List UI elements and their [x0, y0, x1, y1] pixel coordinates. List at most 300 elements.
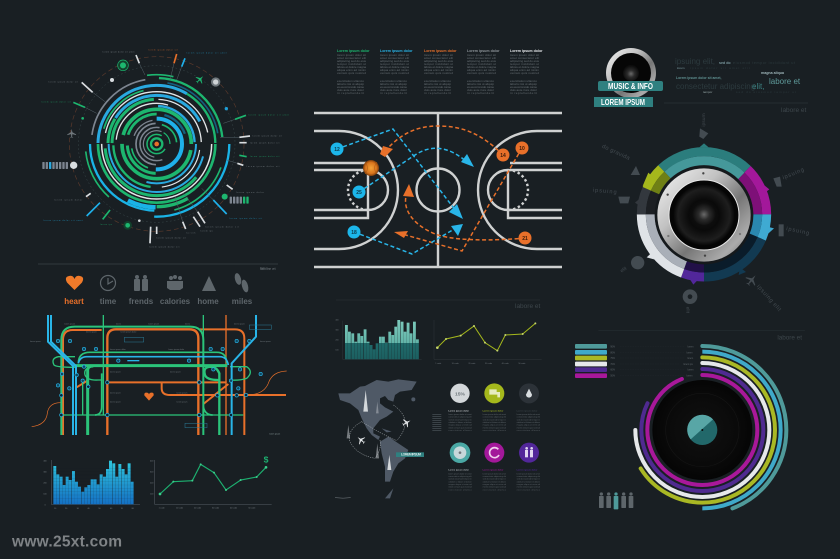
map scale: [335, 497, 351, 499]
center dot: [154, 142, 159, 146]
info text blocks: cididunt ut labore et dolore: [448, 421, 472, 424]
column 1: in reprehenderit: [337, 91, 364, 95]
column 3: laboris nisi ut aliquip: [424, 82, 451, 86]
player markers: 12: [334, 147, 340, 153]
icon: 15 percent: 15%: [455, 391, 466, 397]
wheel labels: lorem ipsum dolor sit amet: [103, 50, 135, 53]
x labels: [54, 508, 135, 510]
icon: disc: [683, 289, 697, 304]
x labels: 30: [77, 508, 80, 510]
label: heart: heart: [64, 297, 84, 306]
icon: heart: [66, 276, 83, 290]
info text blocks: consectetur adipiscing elit: [483, 475, 506, 478]
line: [437, 323, 535, 351]
icon: airplane green: [194, 73, 206, 86]
metro labels: lorem ipsum: [260, 340, 271, 343]
legend labels: 60%: [610, 370, 615, 372]
column 4: aliqua enim ad minim: [467, 68, 496, 72]
column 1: [337, 49, 370, 95]
column 2: [380, 49, 413, 95]
dollar sign: $: [264, 454, 269, 464]
info text blocks: sed do eiusmod tempor in: [517, 418, 541, 421]
column 3: veniam quis nostrud: [424, 71, 453, 75]
info text blocks: minim veniam quis nostrud: [448, 426, 472, 429]
icon: airplane grey: [67, 129, 76, 138]
column 2: in reprehenderit: [380, 91, 407, 95]
teal bar chart: [335, 320, 422, 359]
wheel labels: lorem ipsum dolor sit: [205, 225, 239, 228]
info text blocks: sed do eiusmod tempor in: [483, 478, 507, 481]
column 4: [467, 49, 500, 95]
metro labels: lorem ipsum: [177, 391, 188, 394]
bar stripes: [53, 468, 134, 498]
points: [159, 463, 267, 495]
people row right: [230, 197, 249, 204]
bars: [53, 461, 134, 504]
metro labels: lorem: [185, 323, 190, 326]
icon: refresh: [484, 443, 504, 463]
metro labels: lorem ipsum: [110, 400, 121, 403]
info text blocks: lorem ipsum dolor sit amet: [517, 413, 540, 416]
metro label boxes: [124, 325, 271, 428]
icon: heart: [144, 393, 154, 401]
axis labels: 20 code: [468, 363, 476, 365]
info circles grid: [432, 383, 541, 491]
x labels: 50: [98, 508, 101, 510]
column 2: Lorem ipsum dolor: [380, 49, 413, 53]
icon: couple: [519, 443, 539, 463]
axis labels: 10 code: [176, 507, 184, 509]
wheel labels: lorem ipsum dolor sit amet: [43, 219, 83, 222]
metro labels: lorem ipsum dolor: [110, 348, 126, 351]
metro labels: lorem ipsum: [234, 323, 245, 326]
word cloud: ipsuing elit,: [675, 57, 715, 66]
info text blocks: magna aliqua ut enim ad: [448, 424, 472, 427]
basketball text columns: [337, 49, 543, 95]
column 4: ex ea commodo conse: [467, 85, 494, 89]
axes: 200: [43, 483, 48, 485]
info text blocks: sed do eiusmod tempor in: [517, 478, 541, 481]
word cloud: sed do eiusmod tempor ut: [736, 90, 796, 94]
column 3: duis aute irure dolor: [424, 88, 451, 92]
player markers: [330, 142, 532, 244]
world map: [335, 379, 424, 498]
axes: 300: [43, 472, 48, 474]
icon: home tent: [202, 276, 216, 291]
info text blocks: consectetur adipiscing elit: [448, 475, 472, 478]
axes: 0: [45, 505, 47, 507]
column 3: amet consectetur elit: [424, 56, 453, 60]
legend labels: lorem: [687, 375, 693, 378]
icon: faucet: [484, 383, 504, 403]
axes: [335, 320, 422, 359]
map pins: [347, 390, 391, 470]
icon row: [64, 272, 253, 306]
info text blocks: cididunt ut labore et dolore: [483, 480, 507, 483]
wheel labels: lorem ipsum dolor sit: [253, 135, 282, 138]
label: miles: miles: [232, 297, 253, 306]
axis labels: 100: [150, 493, 154, 495]
green lines: [53, 315, 250, 435]
column 1: veniam quis nostrud: [337, 71, 366, 75]
icon: clock: [100, 276, 116, 290]
axes: 400: [43, 461, 48, 463]
column 3: adipiscing sed do eius: [424, 59, 454, 63]
info text blocks: consectetur adipiscing elit: [448, 416, 472, 419]
points: [436, 322, 536, 352]
column 2: veniam quis nostrud: [380, 71, 409, 75]
axis labels: 30 code: [485, 363, 493, 365]
info text blocks: magna aliqua ut enim ad: [483, 424, 507, 427]
people row left: [42, 162, 68, 169]
axis labels: 40 code: [502, 363, 510, 365]
info text blocks: magna aliqua ut enim ad: [483, 483, 507, 486]
column 2: duis aute irure dolor: [380, 88, 407, 92]
axes: [155, 460, 272, 504]
metro labels: lorem ipsum: [177, 400, 188, 403]
x labels: 70: [121, 508, 124, 510]
info text blocks: magna aliqua ut enim ad: [517, 483, 541, 486]
info text blocks: cididunt ut labore et dolore: [517, 421, 541, 424]
wheel labels: lorem ipsum dolor sit: [149, 245, 180, 248]
column 3: lorem ipsum dolor sit: [424, 53, 453, 57]
column 2: amet consectetur elit: [380, 56, 409, 60]
icon: figure: [779, 224, 784, 236]
column 1: duis aute irure dolor: [337, 88, 364, 92]
label: figure: ipsuing: [786, 226, 810, 237]
info text blocks: Lorem ipsum dolor: [448, 410, 469, 412]
blue bar chart: [43, 460, 140, 510]
orange lines: [32, 315, 287, 435]
column 4: amet consectetur elit: [467, 56, 496, 60]
column 4: duis aute irure dolor: [467, 88, 494, 92]
icon: footprints: [234, 272, 250, 293]
column 5: [510, 49, 543, 95]
column 2: ex ea commodo conse: [380, 85, 407, 89]
land masses: [338, 379, 417, 498]
column 2: aliqua enim ad minim: [380, 68, 410, 72]
divider and caption: labore et: [777, 335, 802, 342]
label: disc: elit: [685, 307, 691, 314]
small dots and markers: [70, 60, 228, 230]
column 4: tempor incididunt ut: [467, 62, 496, 66]
info text blocks: minim veniam quis nostrud: [517, 486, 541, 489]
metro map: [30, 267, 287, 436]
column 5: aliqua enim ad minim: [510, 68, 540, 72]
dashed guide rings: [69, 57, 244, 231]
blue arrowheads: [449, 154, 474, 236]
column 4: Lorem ipsum dolor: [467, 49, 500, 53]
info text blocks: exercitation ullamco: [448, 429, 472, 432]
player markers: 21: [522, 236, 528, 242]
info text blocks: lorem ipsum dolor sit amet: [483, 472, 506, 475]
axes: 300: [335, 330, 340, 332]
word cloud: labore et: [769, 77, 801, 86]
ring icons and labels: [592, 113, 810, 314]
column 4: in reprehenderit: [467, 91, 494, 95]
info text blocks: lorem ipsum dolor sit amet: [483, 413, 506, 416]
column 3: [424, 49, 457, 95]
wheel labels: lorem ipsum dolor sit: [148, 49, 178, 52]
segment pointers: [635, 143, 774, 285]
player markers: 10: [519, 146, 525, 152]
info text blocks: exercitation ullamco: [517, 488, 541, 491]
label: plane: ipsuing elit: [755, 284, 782, 313]
metro labels: lorem ipsum: [269, 433, 280, 436]
axis labels: 400: [150, 461, 154, 463]
x labels: 40: [87, 508, 90, 510]
axis labels: [435, 363, 526, 365]
column 2: tempor incididunt ut: [380, 62, 409, 66]
metro labels: [30, 267, 280, 436]
label: calories: calories: [160, 297, 191, 306]
column 5: labore et dolore magna: [510, 65, 539, 69]
icon: vinyl record: [652, 380, 752, 480]
label: cloud: ipsuing: [592, 188, 617, 196]
column 4: exercitation ullamco: [467, 79, 494, 83]
column 5: veniam quis nostrud: [510, 71, 539, 75]
legend labels: 90%: [610, 346, 615, 348]
axis labels: 30 code: [212, 507, 220, 509]
label: friends: frends: [129, 297, 154, 306]
column 1: exercitation ullamco: [337, 79, 364, 83]
icon: cloud group: [618, 197, 630, 203]
info text blocks: lorem ipsum dolor sit amet: [448, 472, 472, 475]
line: [160, 464, 266, 494]
word cloud: tempor: [703, 90, 712, 94]
column 5: laboris nisi ut aliquip: [510, 82, 537, 86]
banner: music and info: MUSIC & INFO: [608, 82, 653, 91]
column 3: labore et dolore magna: [424, 65, 453, 69]
info text blocks: exercitation ullamco: [483, 429, 507, 432]
legend labels: lorem ips: [683, 363, 694, 366]
side stripes: [432, 414, 441, 431]
info text blocks: sed do eiusmod tempor in: [483, 418, 507, 421]
label: people: ipsuing: [782, 167, 805, 181]
legend bars: [575, 344, 607, 378]
axis labels: 10 code: [452, 363, 460, 365]
column 2: adipiscing sed do eius: [380, 59, 410, 63]
legend labels: lorem: [687, 357, 693, 360]
icon: teal disc: [450, 442, 470, 463]
info text blocks: cididunt ut labore et dolore: [483, 421, 507, 424]
banner: lorem ipsum: LOREM IPSUM: [601, 98, 645, 107]
basketball court diagram: [314, 113, 562, 267]
olive line chart: [434, 320, 542, 365]
column 1: adipiscing sed do eius: [337, 59, 366, 63]
green line chart: [150, 454, 272, 509]
metro labels: lorem ipsum dolor: [121, 331, 137, 334]
divider and caption: labore et: [781, 107, 806, 114]
legend labels: 50%: [610, 376, 615, 378]
column 1: tempor incididunt ut: [337, 62, 366, 66]
axes: 100: [43, 493, 48, 495]
info text blocks: magna aliqua ut enim ad: [448, 483, 472, 486]
metro labels: lorem ipsum: [170, 371, 181, 374]
icon: round: [631, 256, 644, 269]
info text blocks: Lorem ipsum dolor: [483, 470, 503, 472]
player markers: 25: [356, 190, 362, 196]
icon: friends: [134, 275, 148, 291]
column 2: exercitation ullamco: [380, 79, 407, 83]
wheel labels: lorem ipsum dolor sit amet: [187, 52, 227, 55]
column 4: adipiscing sed do eius: [467, 59, 496, 63]
icon: speaker: [655, 166, 753, 264]
column 5: lorem ipsum dolor sit: [510, 53, 539, 57]
axis labels: 50 code: [518, 363, 526, 365]
wheel labels: lorem ipsum dolor: [236, 191, 264, 194]
info text blocks: cididunt ut labore et dolore: [517, 480, 541, 483]
axes: [43, 460, 140, 507]
column 5: ex ea commodo conse: [510, 85, 537, 89]
x labels: 20: [65, 508, 68, 510]
word cloud: elit,: [752, 82, 764, 91]
section divider: center: labore et: [515, 303, 540, 310]
orange arrowheads: [380, 146, 414, 238]
metro labels: lorem ipsum: [110, 371, 121, 374]
axis labels: 1 code: [435, 363, 442, 365]
metro labels: lorem: [116, 323, 121, 326]
metro labels: labore et: [260, 267, 268, 270]
people row: [599, 492, 633, 509]
label: top: ipsum: [701, 113, 707, 127]
axes: 200: [335, 340, 340, 342]
column 4: veniam quis nostrud: [467, 71, 496, 75]
axis labels: 300: [150, 472, 154, 474]
info text blocks: consectetur adipiscing elit: [483, 416, 506, 419]
axis labels: 50 code: [248, 507, 256, 509]
axis labels: 20 code: [194, 507, 202, 509]
info text blocks: sed do eiusmod tempor in: [448, 418, 472, 421]
info text blocks: lorem ipsum dolor sit amet: [517, 472, 540, 475]
column 1: aliqua enim ad minim: [337, 68, 366, 72]
watermark: www.25xt.com: [11, 534, 122, 550]
column 3: aliqua enim ad minim: [424, 68, 454, 72]
wheel labels: lorem ips: [201, 229, 213, 232]
column 1: ex ea commodo conse: [337, 85, 364, 89]
info text blocks: exercitation ullamco: [448, 488, 472, 491]
info text blocks: cididunt ut labore et dolore: [448, 480, 472, 483]
icon row divider and caption: labore et: [260, 266, 276, 271]
progress arcs: [618, 346, 786, 514]
column 5: tempor incididunt ut: [510, 62, 539, 66]
wheel labels: lorem ipsum dolor sit: [41, 101, 71, 104]
concentric arcs upper half: [87, 75, 226, 213]
info text blocks: [448, 410, 541, 491]
word cloud: ipsum dolor sit amet elit: [690, 66, 750, 70]
legend labels: lorem: [688, 345, 694, 348]
blue play arrows: [337, 129, 468, 254]
wheel labels: lorem ipsum dolor sit: [247, 165, 280, 168]
info text blocks: minim veniam quis nostrud: [483, 426, 507, 429]
colored segments inner: [650, 161, 758, 268]
metro labels: lorem ipsum: [86, 331, 97, 334]
column 5: amet consectetur elit: [510, 56, 539, 60]
info text blocks: minim veniam quis nostrud: [517, 426, 541, 429]
speaker ring infographic: [592, 113, 810, 314]
word cloud: lorem: [677, 66, 685, 70]
label: time: time: [100, 297, 117, 306]
icon: tent: [631, 166, 640, 175]
x labels: 80: [132, 508, 135, 510]
wheel labels: lorem ipsum dolor: [54, 198, 83, 201]
word cloud: eiusmod tempor incididunt ut: [733, 61, 795, 65]
axis labels: 40 code: [230, 507, 238, 509]
info text blocks: minim veniam quis nostrud: [483, 486, 507, 489]
flight paths: [349, 405, 405, 458]
legend labels: lorem: [688, 369, 694, 372]
icon: top: [699, 128, 708, 139]
column 3: Lorem ipsum dolor: [424, 49, 457, 53]
column 2: labore et dolore magna: [380, 65, 409, 69]
column 1: amet consectetur elit: [337, 56, 366, 60]
court lines: [314, 113, 562, 267]
info text blocks: Lorem ipsum dolor: [448, 470, 469, 472]
column 2: laboris nisi ut aliquip: [380, 82, 407, 86]
column 3: tempor incididunt ut: [424, 62, 453, 66]
info text blocks: exercitation ullamco: [517, 429, 541, 432]
info text blocks: consectetur adipiscing elit: [517, 416, 540, 419]
legend labels: lorem: [687, 351, 693, 354]
radial data wheel: [41, 49, 289, 248]
wheel labels: lorem: [186, 231, 196, 234]
label: tent: do gravida: [601, 144, 631, 162]
metro labels: lorem ipsum: [64, 323, 75, 326]
airplane icons: [355, 417, 413, 446]
info text blocks: Lorem ipsum dolor: [483, 410, 503, 412]
info text blocks: lorem ipsum dolor sit amet: [448, 413, 472, 416]
icon: people: [773, 177, 782, 187]
column 5: exercitation ullamco: [510, 79, 537, 83]
wheel labels: lorem ipsum dolor sit: [49, 81, 78, 84]
info text blocks: Lorem ipsum dolor: [517, 410, 537, 412]
metro stations: [56, 339, 262, 417]
axis labels: 200: [150, 483, 154, 485]
icon: small speaker: [606, 48, 656, 98]
vinyl infographic: [575, 331, 805, 514]
axes: 100: [335, 350, 340, 352]
radial ticks: [73, 54, 250, 243]
wheel labels: lorem ipsum dolor sit: [229, 217, 262, 220]
axis labels: 1 code: [159, 507, 166, 509]
label: round: elit: [619, 265, 629, 274]
column 5: duis aute irure dolor: [510, 88, 537, 92]
wheel labels: lorem ipsum dolor sit: [250, 155, 280, 158]
axis labels: [150, 461, 256, 509]
column 3: exercitation ullamco: [424, 79, 451, 83]
axes: [434, 320, 542, 359]
info text blocks: Lorem ipsum dolor: [517, 470, 537, 472]
concentric arcs lower half: [84, 71, 229, 217]
column 4: labore et dolore magna: [467, 65, 496, 69]
column 4: lorem ipsum dolor sit: [467, 53, 496, 57]
disc hole: [688, 294, 692, 299]
column 3: ex ea commodo conse: [424, 85, 451, 89]
wheel labels: [41, 49, 289, 248]
column 1: Lorem ipsum dolor: [337, 49, 370, 53]
colored segments outer: [641, 152, 767, 277]
icon: airplane: [743, 272, 760, 288]
metro labels: lorem ipsum: [110, 391, 121, 394]
wheel labels: lorem ips: [100, 223, 112, 226]
wheel labels: lorem ipsum dolor sit: [250, 141, 280, 144]
column 2: lorem ipsum dolor sit: [380, 53, 409, 57]
inner rings: [136, 123, 177, 165]
bars: [345, 320, 419, 359]
info text blocks: sed do eiusmod tempor in: [448, 478, 472, 481]
legend labels: [610, 345, 694, 378]
column 5: Lorem ipsum dolor: [510, 49, 543, 53]
